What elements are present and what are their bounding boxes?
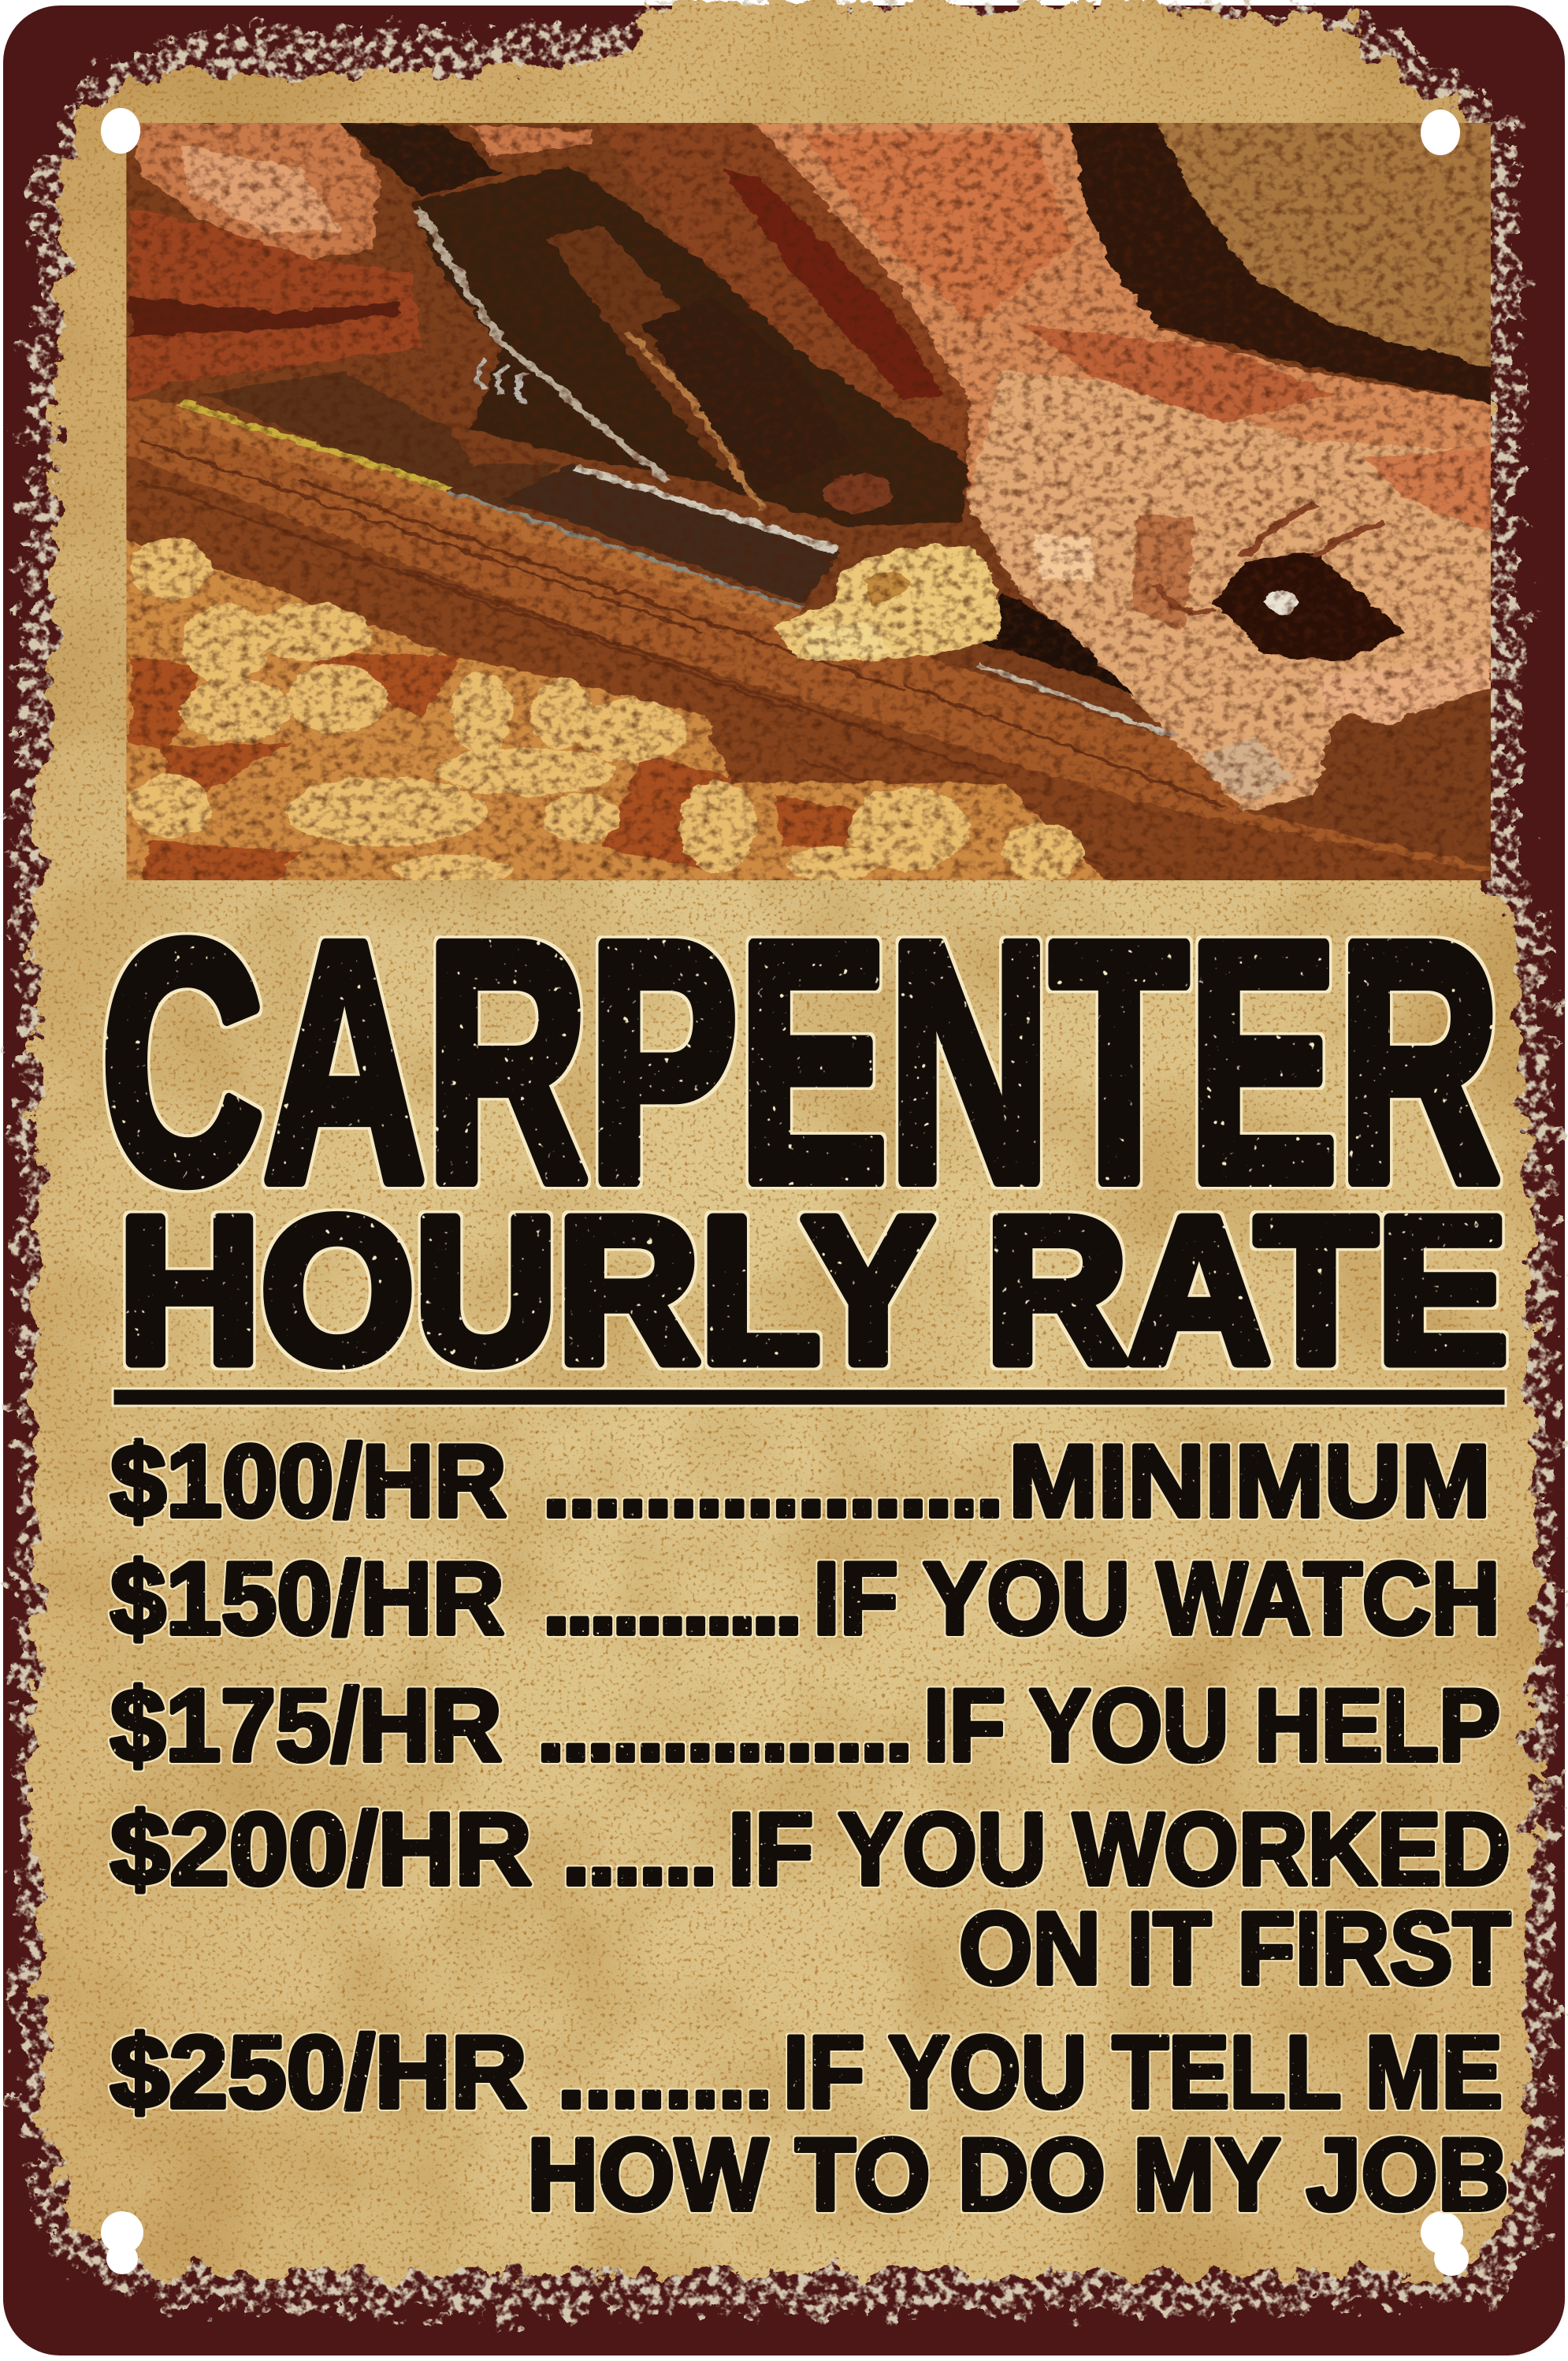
- rate row: $100/HR minimum: [110, 1423, 1491, 1538]
- painting: hands planing wood: [121, 116, 1505, 887]
- wood plank: [121, 400, 1505, 887]
- wood background top right: [1157, 123, 1491, 367]
- subtitle: HOURLY RATE: HOURLY RATE: [118, 1174, 1508, 1406]
- rate row: $150/HR if you watch: IF YOU WATCH: [813, 1541, 1500, 1656]
- spring: [477, 359, 526, 403]
- divider rule: [113, 1389, 1506, 1406]
- fist shadow: [1214, 551, 1404, 661]
- rate row: $150/HR if you watch: [110, 1541, 1500, 1656]
- left hand: [131, 122, 381, 261]
- rate row: $250/HR if you tell me how to do my job: ........: [557, 2014, 773, 2129]
- plane blade: [502, 464, 842, 603]
- rate row: $175/HR if you help: IF YOU HELP: [923, 1668, 1500, 1783]
- rate row: $150/HR if you watch: ...........: [542, 1541, 803, 1656]
- plane body: [411, 165, 968, 528]
- rate row: $150/HR if you watch: $150/HR: [110, 1541, 504, 1656]
- rate row: $250/HR if you tell me how to do my job: [110, 2014, 1509, 2232]
- rate list: [110, 1423, 1510, 2232]
- rate row: $175/HR if you help: [110, 1668, 1500, 1783]
- rate row: $200/HR if you worked on it first: $200/HR: [110, 1791, 532, 1906]
- rate row: $175/HR if you help: $175/HR: [110, 1668, 502, 1783]
- rate row: $175/HR if you help: ...............: [537, 1668, 913, 1783]
- dark hair shadow: [1064, 116, 1505, 406]
- shavings pile: [121, 539, 1113, 887]
- rate row: $250/HR if you tell me how to do my job: HOW TO DO MY JOB: [527, 2117, 1509, 2232]
- rate row: $200/HR if you worked on it first: ON IT FIRST: [959, 1891, 1510, 2006]
- rate row: $100/HR minimum: ..................: [542, 1423, 1004, 1538]
- rate row: $100/HR minimum: $100/HR: [110, 1423, 507, 1538]
- rate row: $100/HR minimum: MINIMUM: [1009, 1423, 1491, 1538]
- rate row: $200/HR if you worked on it first: ......: [562, 1791, 718, 1906]
- rate row: $250/HR if you tell me how to do my job: IF YOU TELL ME: [783, 2014, 1503, 2129]
- rate row: $200/HR if you worked on it first: IF YOU WORKED: [728, 1791, 1510, 1906]
- rate row: $250/HR if you tell me how to do my job: $250/HR: [110, 2014, 527, 2129]
- rate row: $200/HR if you worked on it first: [110, 1791, 1510, 2006]
- yellow plank edge: [180, 403, 451, 490]
- red-brown handle strip: [592, 116, 968, 464]
- wood curl shaving: [772, 545, 1001, 661]
- arm: [748, 116, 1505, 812]
- plane silver edge: [416, 209, 667, 481]
